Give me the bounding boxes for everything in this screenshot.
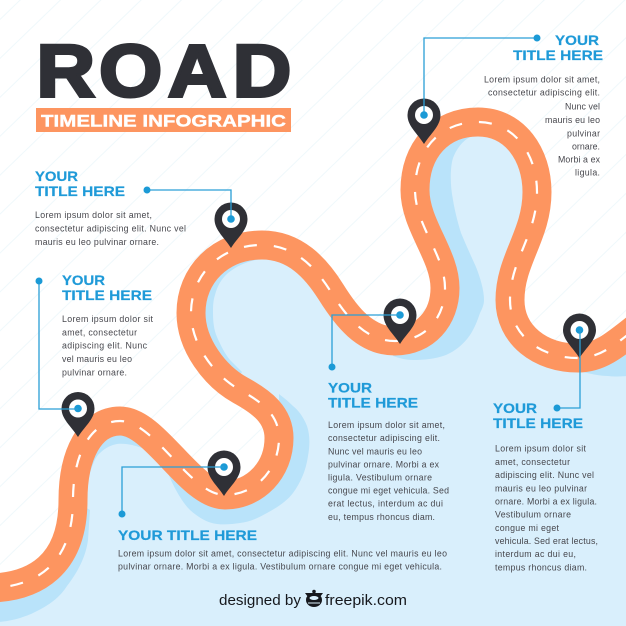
text block 6: bottom: pulvinar ornare. Morbi a ex ligula. Vestibulum ornare congue mi eget vehicula. <box>118 562 442 572</box>
text block 3: top right: Nunc vel <box>565 102 600 112</box>
text block 4: centre: YOUR <box>328 380 372 396</box>
text block 4: centre: eu, tempus rhoncus diam. <box>328 512 435 522</box>
subtitle banner <box>36 108 291 132</box>
text block 5: bottom right: ornare. Morbi a ex ligula. <box>495 496 597 506</box>
road shadows <box>0 122 626 622</box>
pin 1 <box>214 202 248 248</box>
text block 1: Lorem ipsum dolor sit amet, <box>35 210 152 220</box>
road <box>0 122 626 588</box>
text block 2: YOUR <box>62 272 105 288</box>
text block 4: centre: consectetur adipiscing elit. <box>328 433 440 443</box>
text block 3: top right <box>484 32 603 178</box>
text block 5: bottom right: adipiscing elit. Nunc vel <box>495 470 594 480</box>
text block 4: centre: Nunc vel mauris eu leo <box>328 446 422 456</box>
connector 1 <box>144 186 231 219</box>
text block 2: amet, consectetur <box>62 327 137 337</box>
text block 5: bottom right <box>493 400 598 572</box>
text block 3: top right: pulvinar <box>567 128 600 138</box>
text block 4: centre: ligula. Vestibulum ornare <box>328 472 432 482</box>
text block 5: bottom right: tempus rhoncus diam. <box>495 562 587 572</box>
text block 3: top right: Lorem ipsum dolor sit amet, <box>484 74 600 84</box>
text block 1 <box>35 168 186 247</box>
text block 2 <box>62 272 154 377</box>
text block 1: mauris eu leo pulvinar ornare. <box>35 237 159 247</box>
text block 2: pulvinar ornare. <box>62 367 127 377</box>
text block 5: bottom right: interdum ac dui eu, <box>495 549 576 559</box>
pin 6 <box>208 451 240 496</box>
text block 3: top right: ornare. <box>572 142 600 152</box>
connector 5 <box>36 278 78 409</box>
text block 5: bottom right: amet, consectetur <box>495 457 570 467</box>
text block 3: top right: mauris eu leo <box>545 115 600 125</box>
text block 3: top right: ligula. <box>575 168 600 178</box>
text block 5: bottom right: mauris eu leo pulvinar <box>495 483 587 493</box>
footer credit: freepik.com <box>325 592 407 609</box>
pin 2 <box>408 98 440 144</box>
text block 6: bottom: Lorem ipsum dolor sit amet, consectetur adipiscing elit. Nunc vel mauris eu leo <box>118 548 447 558</box>
pin 3 <box>384 298 416 344</box>
connector 2 <box>424 34 540 115</box>
footer credit: designed by <box>219 592 301 609</box>
connector 3 <box>328 315 400 370</box>
text block 5: bottom right: Vestibulum ornare <box>495 510 571 520</box>
text block 4: centre: TITLE HERE <box>328 394 418 410</box>
icon: freepik mascot <box>305 590 323 607</box>
text block 5: bottom right: congue mi eget <box>495 523 560 533</box>
title: ROAD: ROAD <box>36 31 291 113</box>
text block 4: centre: pulvinar ornare. Morbi a ex <box>328 459 440 469</box>
text block 3: top right: Morbi a ex <box>558 155 601 165</box>
text block 5: bottom right: TITLE HERE <box>493 415 583 431</box>
footer credit <box>219 590 407 609</box>
text block 3: top right: YOUR <box>555 32 599 48</box>
text block 2: TITLE HERE <box>62 287 152 303</box>
text block 4: centre: congue mi eget vehicula. Sed <box>328 486 449 496</box>
text block 6: bottom <box>118 527 447 572</box>
pin 5 <box>62 392 94 437</box>
text block 5: bottom right: Lorem ipsum dolor sit <box>495 444 587 454</box>
text block 2: adipiscing elit. Nunc <box>62 341 148 351</box>
text block 6: bottom: YOUR TITLE HERE <box>118 527 257 543</box>
connector 6 <box>118 467 224 518</box>
text block 1: YOUR <box>35 168 78 184</box>
text block 2: Lorem ipsum dolor sit <box>62 314 154 324</box>
text block 4: centre: erat lectus, interdum ac dui <box>328 499 443 509</box>
text block 4: centre: Lorem ipsum dolor sit amet, <box>328 420 445 430</box>
text block 4: centre <box>328 380 449 522</box>
connector 4 <box>554 330 580 412</box>
subtitle banner: TIMELINE INFOGRAPHIC <box>41 112 286 130</box>
pin 4 <box>563 314 596 358</box>
text block 5: bottom right: YOUR <box>493 400 537 416</box>
text block 1: consectetur adipiscing elit. Nunc vel <box>35 224 186 234</box>
text block 2: vel mauris eu leo <box>62 354 132 364</box>
text block 3: top right: consectetur adipiscing elit. <box>488 88 600 98</box>
text block 3: top right: TITLE HERE <box>513 47 603 63</box>
text block 1: TITLE HERE <box>35 183 125 199</box>
text block 5: bottom right: vehicula. Sed erat lectus, <box>495 536 598 546</box>
